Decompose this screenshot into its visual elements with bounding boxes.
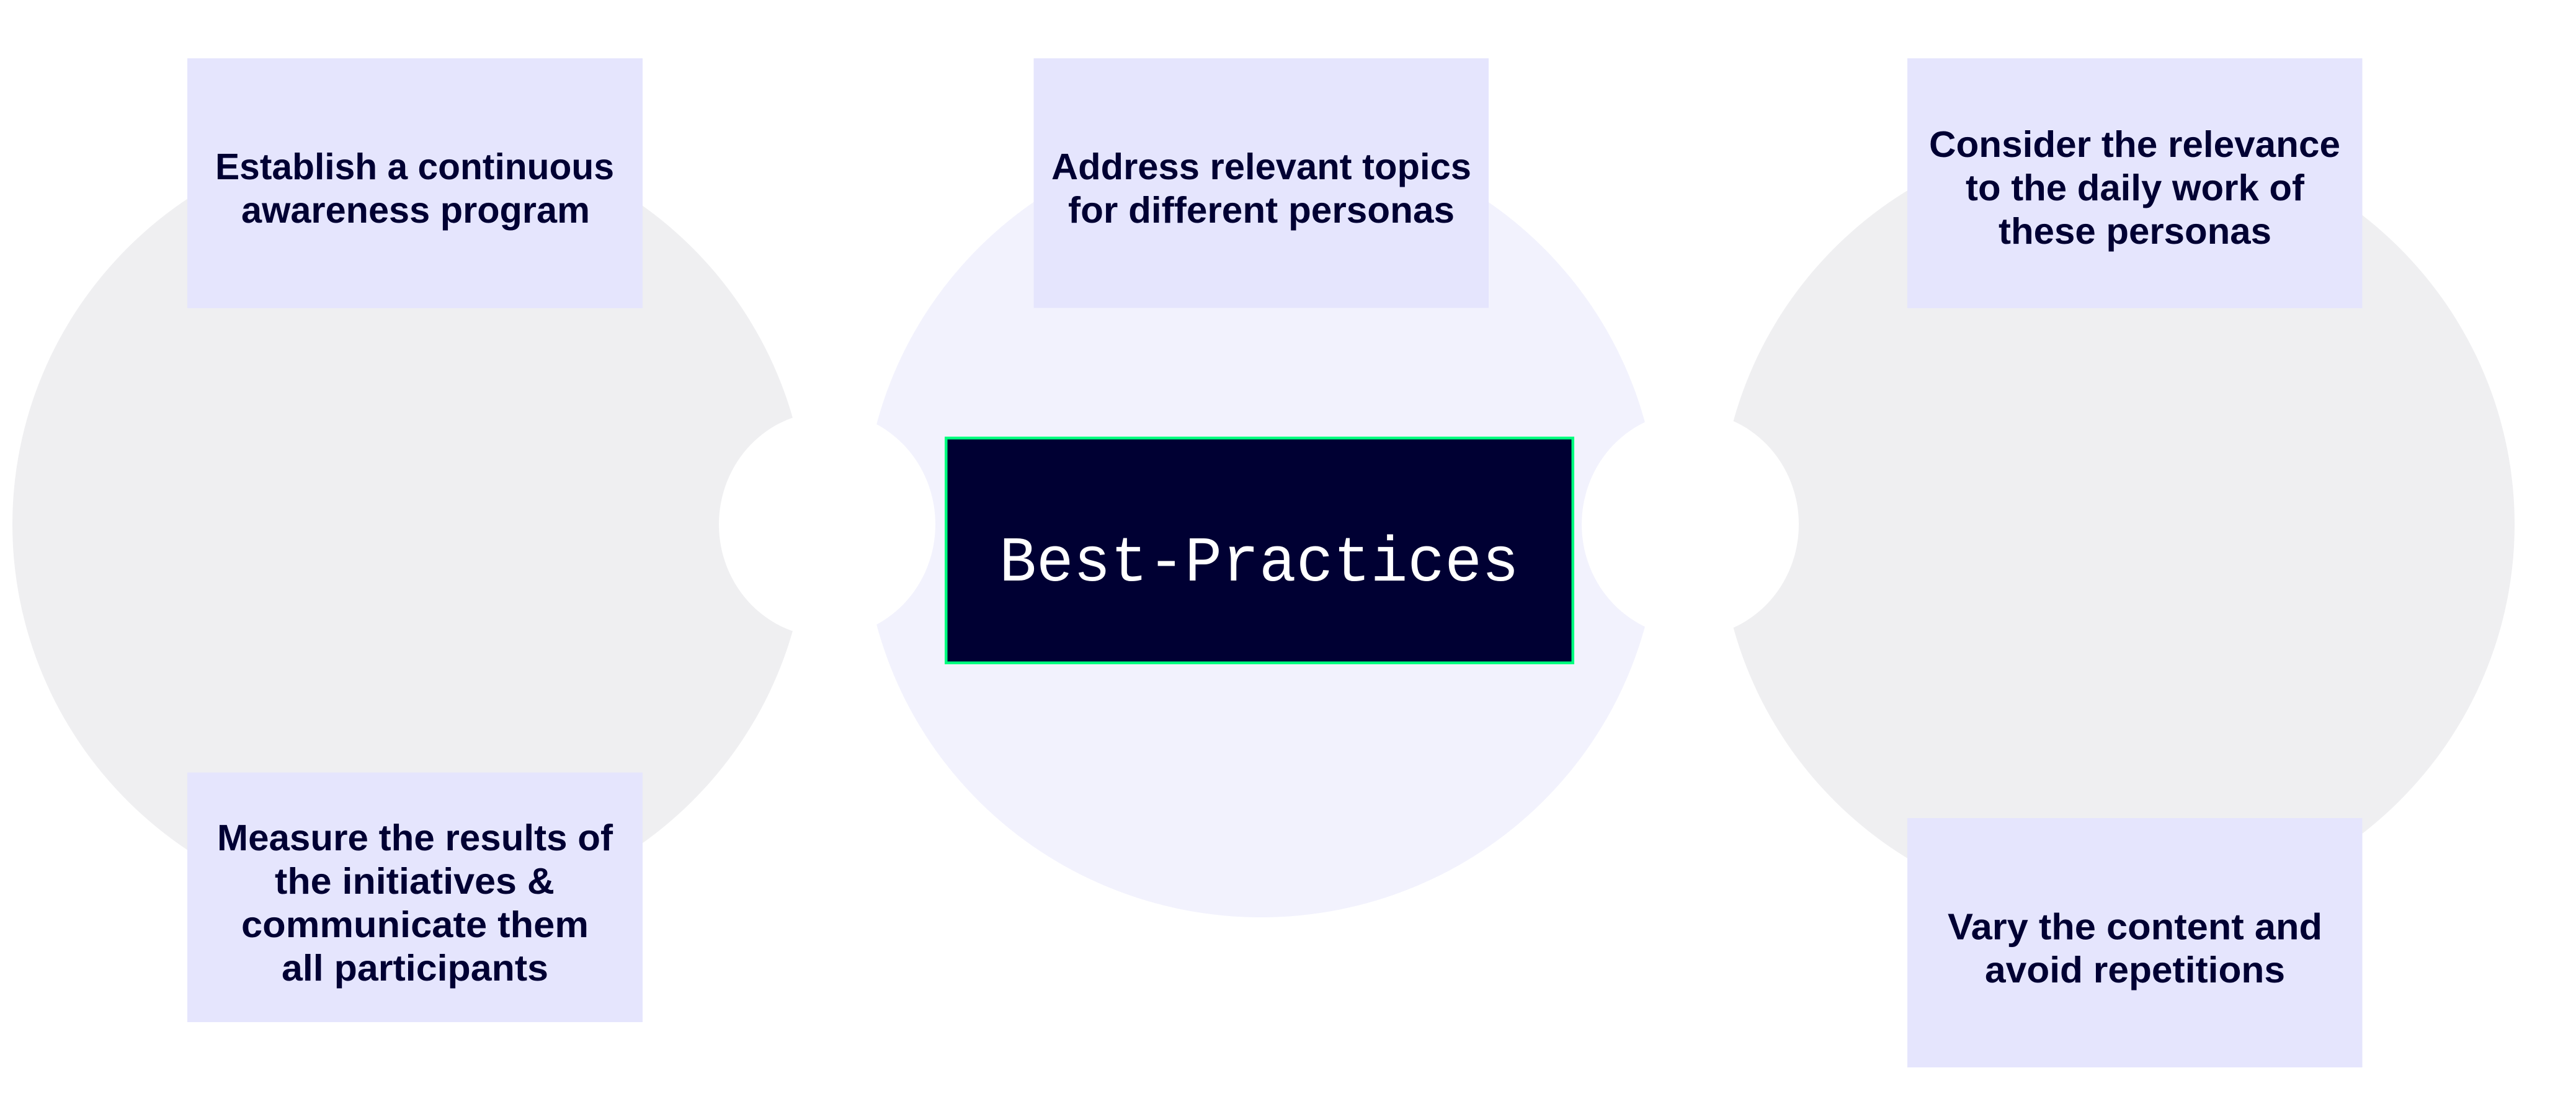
card text: measure the results: communicate them [241,904,589,945]
title box: best-practices [946,438,1573,663]
white connector notch: right [1582,412,1799,637]
middle lavender circle [863,131,1659,917]
card text: measure the results: Measure the results of [217,817,613,858]
card text: address relevant topics [1051,146,1471,231]
card text: measure the results: the initiatives & [275,861,555,902]
card text: consider relevance to daily work: Consider the relevance [1929,124,2340,165]
card text: address relevant topics: for different personas [1068,190,1455,231]
card text: vary the content [1948,907,2322,990]
card: measure the results [187,773,643,1022]
card text: vary the content: Vary the content and [1948,907,2322,948]
left grey circle [12,131,808,917]
card text: establish awareness program: awareness program [241,190,590,231]
card: vary the content [1907,818,2362,1067]
white connector notch: left [719,412,935,637]
card text: measure the results [217,817,613,989]
card text: consider relevance to daily work: to the daily work of [1966,167,2304,208]
card text: vary the content: avoid repetitions [1985,950,2285,990]
card text: establish awareness program: Establish a continuous [215,146,614,187]
card text: consider relevance to daily work: these personas [1999,211,2271,252]
card text: address relevant topics: Address relevant topics [1051,146,1471,187]
card: consider relevance to daily work [1907,58,2362,308]
card text: measure the results: all participants [282,948,548,989]
card text: consider relevance to daily work [1929,124,2340,252]
card: address relevant topics [1033,58,1489,308]
card text: establish awareness program [215,146,614,231]
right grey circle [1719,131,2515,917]
card: establish awareness program [187,58,643,308]
title text: Best-Practices [999,527,1519,600]
